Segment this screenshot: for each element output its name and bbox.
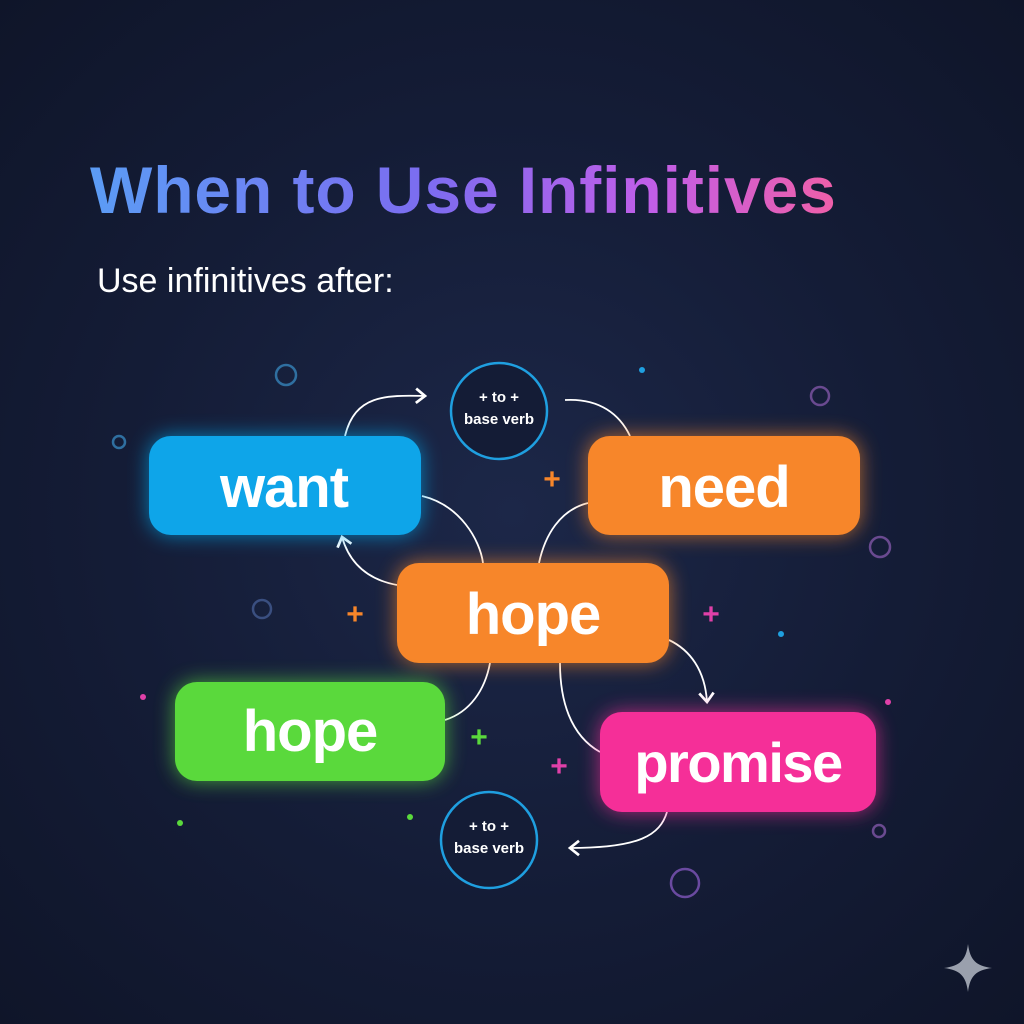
- circle: + to + base verb bottom: [441, 792, 537, 888]
- plus signs: +: [470, 721, 488, 754]
- plus signs: +: [550, 750, 568, 783]
- plus signs: +: [346, 598, 364, 631]
- circle: + to + base verb bottom: + to +: [469, 818, 509, 835]
- word box: need: need: [658, 455, 790, 520]
- connectors: [342, 396, 707, 848]
- word box: promise: [600, 712, 876, 812]
- title: When to Use Infinitives: [90, 153, 837, 227]
- circle: + to + base verb top: + to +: [479, 389, 519, 406]
- word box: want: want: [219, 455, 349, 520]
- circle: + to + base verb bottom: base verb: [454, 840, 524, 857]
- word box: want: [149, 436, 421, 535]
- plus signs: +: [543, 463, 561, 496]
- icon: sparkle: [944, 944, 992, 992]
- subtitle: Use infinitives after:: [97, 262, 394, 300]
- decorative dots and rings: [113, 365, 890, 897]
- word box: hope green: [175, 682, 445, 781]
- plus signs: +: [702, 598, 720, 631]
- word box: hope green: hope: [243, 699, 377, 764]
- word box: hope center: [397, 563, 669, 663]
- word box: promise: promise: [634, 731, 842, 794]
- plus signs: [346, 463, 720, 783]
- circle: + to + base verb top: [451, 363, 547, 459]
- word box: hope center: hope: [466, 582, 600, 647]
- word box: need: [588, 436, 860, 535]
- circle: + to + base verb top: base verb: [464, 411, 534, 428]
